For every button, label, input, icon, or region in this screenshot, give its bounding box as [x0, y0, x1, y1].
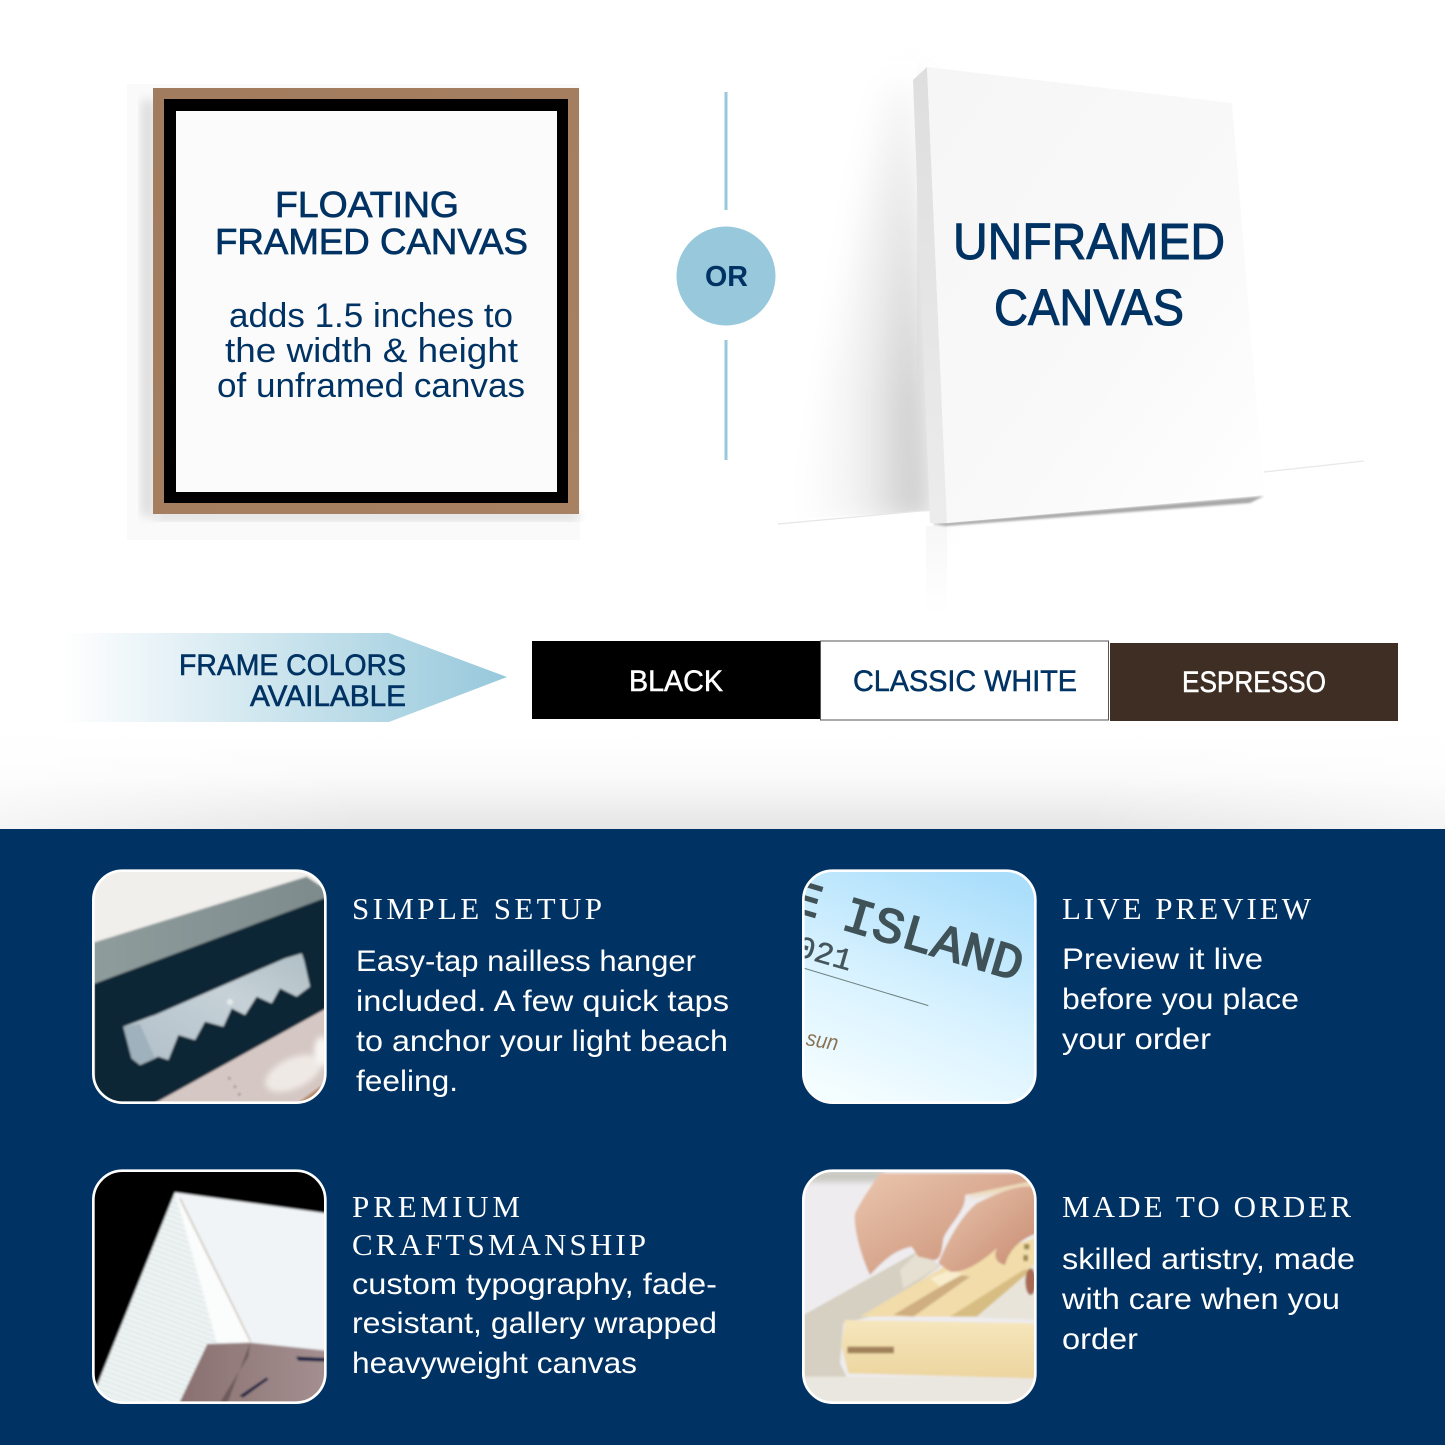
white canvas	[176, 111, 557, 492]
text: made to order body: order	[1062, 1323, 1138, 1356]
heading: live preview: LIVE PREVIEW	[1062, 891, 1312, 926]
photo: live preview print: E	[786, 874, 828, 932]
text: simple setup body: included. A few quick taps	[356, 985, 729, 1018]
heading: unframed canvas	[953, 213, 1225, 336]
divider: or badge with lines	[676, 92, 776, 460]
text: size note: of unframed canvas	[217, 367, 525, 405]
arrow: frame colors available: FRAME COLORS	[179, 649, 406, 682]
feature: premium craftsmanship	[90, 1167, 717, 1407]
swatch: black: BLACK	[629, 665, 723, 698]
photo: live preview print: 021	[791, 931, 856, 980]
divider: or badge with lines: OR	[705, 261, 748, 293]
text: size note: the width & height	[225, 332, 519, 370]
text: live preview body	[1062, 943, 1299, 1056]
text: premium craftsmanship body: heavyweight canvas	[352, 1347, 637, 1380]
heading: simple setup: SIMPLE SETUP	[352, 891, 602, 926]
feature: live preview	[786, 867, 1312, 1107]
heading: premium craftsmanship: PREMIUM	[352, 1189, 520, 1224]
text: premium craftsmanship body: custom typography, fade-	[352, 1268, 717, 1301]
text: made to order body: skilled artistry, made	[1062, 1243, 1355, 1276]
text: live preview body: Preview it live	[1062, 943, 1263, 976]
text: made to order body: with care when you	[1061, 1283, 1340, 1316]
text: live preview body: your order	[1062, 1023, 1211, 1056]
photo: live preview print: sun	[804, 1025, 840, 1055]
photo: sawtooth hanger	[90, 867, 330, 1107]
photo: hands stretching canvas	[800, 1167, 1040, 1407]
swatch: classic white: CLASSIC WHITE	[853, 665, 1077, 698]
heading: premium craftsmanship: CRAFTSMANSHIP	[352, 1227, 646, 1262]
heading: floating framed canvas	[215, 184, 528, 262]
heading: unframed canvas: CANVAS	[994, 279, 1184, 336]
feature: made to order	[800, 1167, 1355, 1407]
feature: simple setup	[90, 867, 729, 1107]
photo: live preview print	[786, 867, 1040, 1107]
heading: premium craftsmanship	[352, 1189, 646, 1262]
photo: canvas corner fold	[90, 1167, 330, 1407]
text: simple setup body: to anchor your light beach	[356, 1025, 728, 1058]
swatch: espresso: ESPRESSO	[1182, 666, 1326, 699]
photo: live preview print: ISLAND	[835, 889, 1029, 996]
shadow band above navy panel	[0, 735, 1445, 829]
panel: unframed canvas	[700, 60, 1364, 614]
text: simple setup body: Easy-tap nailless hanger	[356, 945, 696, 978]
canvas front	[927, 67, 1264, 523]
text: premium craftsmanship body	[352, 1268, 717, 1380]
heading: made to order: MADE TO ORDER	[1062, 1189, 1351, 1224]
wood frame	[153, 88, 579, 514]
panel: floating framed canvas	[127, 84, 580, 540]
swatch: espresso	[1110, 643, 1398, 721]
panel: navy features	[0, 829, 1445, 1445]
heading: floating framed canvas: FRAMED CANVAS	[215, 221, 528, 262]
text: premium craftsmanship body: resistant, gallery wrapped	[352, 1307, 717, 1340]
arrow: frame colors available	[63, 633, 507, 722]
text: simple setup body	[356, 945, 729, 1098]
text: made to order body	[1061, 1243, 1355, 1356]
canvas side	[913, 67, 947, 523]
text: live preview body: before you place	[1062, 983, 1299, 1016]
swatch: black	[532, 641, 820, 719]
black inner frame	[164, 99, 568, 503]
arrow: frame colors available: AVAILABLE	[250, 680, 406, 713]
heading: unframed canvas: UNFRAMED	[953, 213, 1225, 270]
text: simple setup body: feeling.	[356, 1065, 458, 1098]
text: size note	[217, 297, 525, 405]
text: size note: adds 1.5 inches to	[229, 297, 513, 335]
heading: floating framed canvas: FLOATING	[275, 184, 459, 225]
swatches: frame colors	[532, 641, 1398, 721]
swatch: classic white	[820, 641, 1108, 720]
